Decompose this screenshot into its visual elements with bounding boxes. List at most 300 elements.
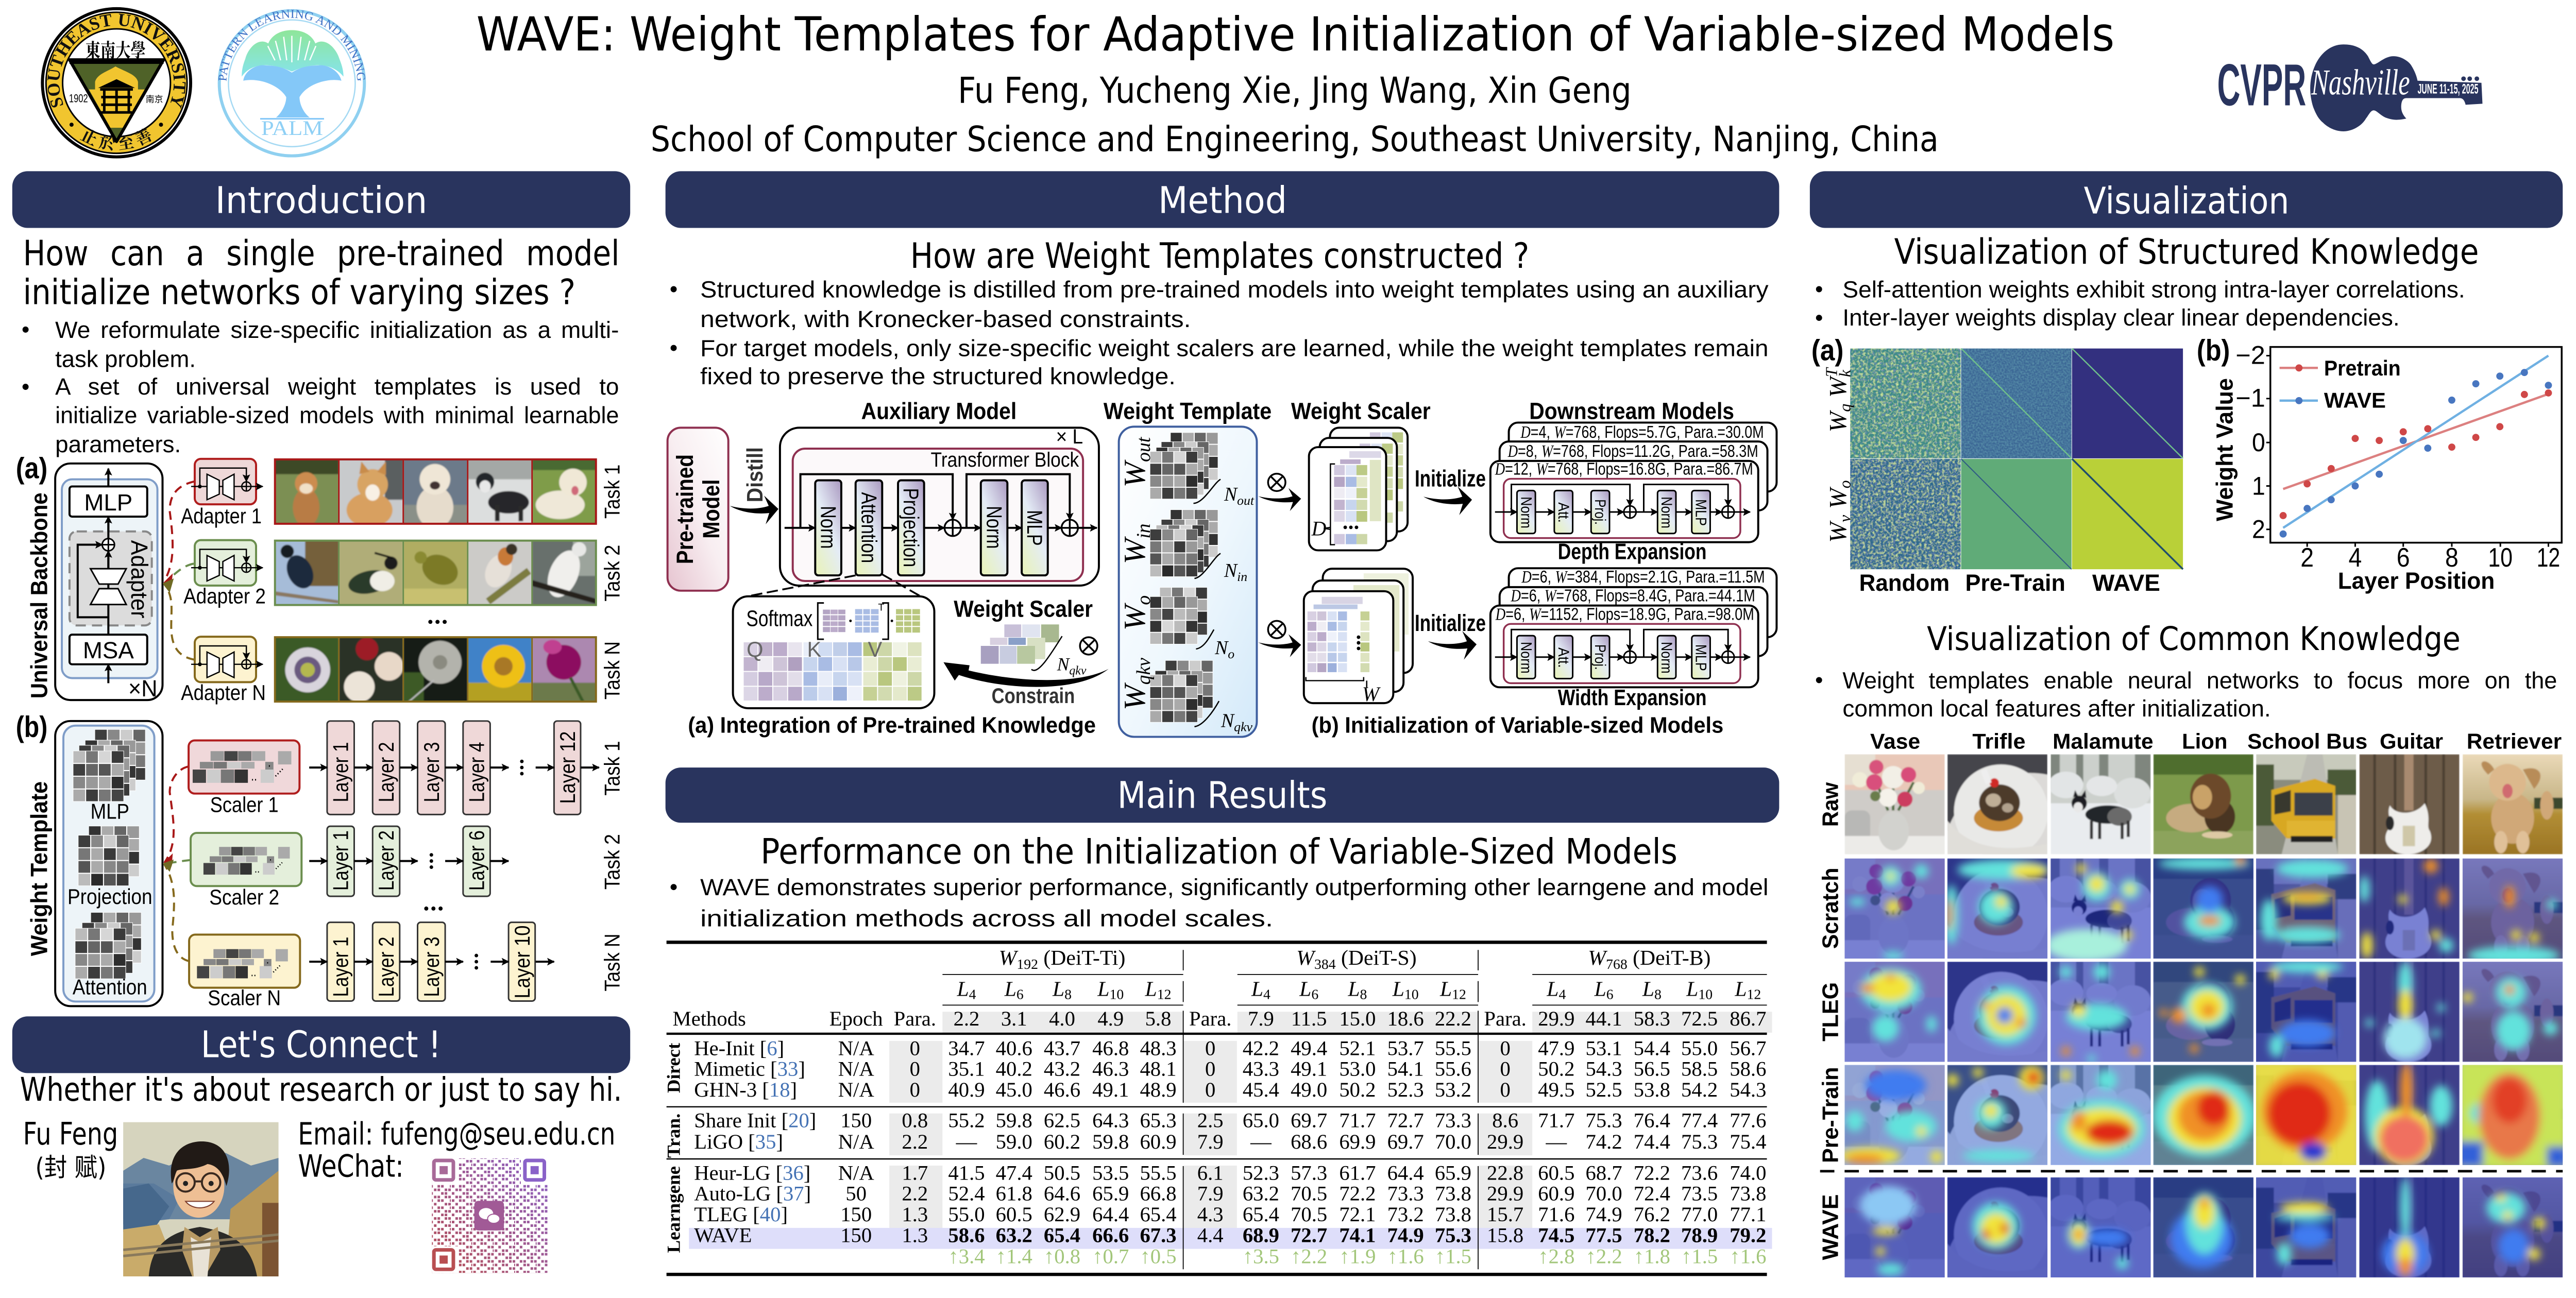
contact name: (封 赋) xyxy=(35,1153,106,1183)
adapter 2: Adapter 2 xyxy=(183,584,266,608)
row: WAVE: 1.3 xyxy=(902,1224,928,1247)
results bullet xyxy=(671,874,1769,932)
panel: Main Results xyxy=(663,767,1779,1274)
task labels for (b): Task N xyxy=(600,933,624,992)
correlation matrices (a) xyxy=(1811,334,2183,596)
row: He-Init: 0 xyxy=(1500,1037,1511,1060)
common knowledge bullet xyxy=(1816,667,2557,722)
row: Auto-LG: 72.4 xyxy=(1634,1182,1670,1205)
row: Share Init: 62.5 xyxy=(1044,1108,1080,1132)
row: Share Init: 75.3 xyxy=(1586,1108,1622,1132)
weight template panel: N xyxy=(1224,484,1237,505)
row: LiGO: 60.2 xyxy=(1044,1130,1080,1153)
table header: layer counts: L xyxy=(1439,978,1452,1001)
row: improvements: ↑1.9 xyxy=(1339,1244,1376,1268)
distill arrow xyxy=(730,447,778,524)
row: GHN-3: N/A xyxy=(838,1078,874,1101)
row: Auto-LG: 2.2 xyxy=(902,1182,928,1205)
table header: layer counts: L xyxy=(1686,978,1698,1001)
row: LiGO: 74.4 xyxy=(1634,1130,1670,1153)
kronecker symbols and arrows to scaler xyxy=(1258,474,1301,657)
table header: layer counts: L xyxy=(1392,978,1404,1001)
task labels: Task 2 xyxy=(600,545,624,602)
row: Auto-LG: 73.3 xyxy=(1387,1182,1424,1205)
caption (b): (b) Initialization of Variable-sized Models xyxy=(1312,713,1723,738)
auxiliary model with transformer block: Transformer Block xyxy=(931,449,1079,471)
row: Share Init: 76.4 xyxy=(1634,1108,1670,1132)
common knowledge bullet: Weight templates enable neural networks to focus more on the xyxy=(1842,667,2557,693)
weight template panel xyxy=(1117,426,1257,737)
row: TLEG: 73.8 xyxy=(1435,1203,1471,1226)
row: Auto-LG: 70.0 xyxy=(1586,1182,1622,1205)
heatmap column labels: Guitar xyxy=(2380,729,2443,753)
row: LiGO: 2.2 xyxy=(902,1130,928,1153)
row: LiGO: 74.2 xyxy=(1586,1130,1622,1153)
row: improvements: ↑2.8 xyxy=(1538,1244,1574,1268)
auxiliary model with transformer block xyxy=(780,425,1099,586)
row: He-Init: 55.5 xyxy=(1435,1037,1471,1060)
row: LiGO: 68.6 xyxy=(1291,1130,1327,1153)
depth scaler cards: D xyxy=(1311,518,1327,540)
table header: column names and parameter counts: 72.5 xyxy=(1681,1007,1718,1030)
weight scaler with constrain arrow xyxy=(943,595,1109,708)
row: Share Init: 150 xyxy=(840,1108,872,1132)
table header: layer counts: 4 xyxy=(1558,986,1566,1002)
row: TLEG: 62.9 xyxy=(1044,1203,1080,1226)
invitation sentence: Whether it's about research or just to say hi. xyxy=(20,1070,622,1108)
row: He-Init: 0 xyxy=(1205,1037,1215,1060)
initialize labels and arrows xyxy=(1415,465,1486,660)
scaler 1 xyxy=(189,741,299,816)
row: Mimetic: 0 xyxy=(1205,1057,1215,1080)
table header: layer counts: 10 xyxy=(1109,986,1124,1002)
row: Heur-LG: 22.8 xyxy=(1487,1162,1523,1185)
row: LiGO: 75.3 xyxy=(1681,1130,1718,1153)
row: He-Init: 40.6 xyxy=(996,1037,1032,1060)
weight scaler with constrain arrow: N xyxy=(1057,654,1069,675)
row: Share Init: 65.3 xyxy=(1140,1108,1177,1132)
task labels for (b): Task 1 xyxy=(600,741,624,796)
scatter chart (b): 2 xyxy=(2252,515,2265,544)
auxiliary model with transformer block: Norm xyxy=(816,506,840,549)
row: Mimetic: 48.1 xyxy=(1140,1057,1177,1080)
method bullet list: network, with Kronecker-based constraints. xyxy=(700,306,1191,332)
auxiliary model with transformer block: Attention xyxy=(857,492,882,563)
universal backbone block xyxy=(55,464,162,702)
scatter chart (b): 6 xyxy=(2397,542,2410,572)
scatter chart (b): Layer Position xyxy=(2338,568,2495,594)
logo: Southeast University seal xyxy=(41,7,192,159)
row: Auto-LG: 60.9 xyxy=(1538,1182,1574,1205)
weight template stack panel: MLP xyxy=(91,799,129,823)
softmax attention detail: V xyxy=(868,637,883,661)
weight scaler with constrain arrow: Constrain xyxy=(992,684,1075,708)
correlation matrices (a): o xyxy=(1836,480,1854,488)
row: improvements: ↑2.2 xyxy=(1291,1244,1327,1268)
structured knowledge bullets: Self-attention weights exhibit strong intra-layer correlations. xyxy=(1842,276,2465,302)
task N layers: Layer 3 xyxy=(419,936,444,997)
correlation matrices (a): W xyxy=(1825,412,1852,432)
heatmap row labels: Scratch xyxy=(1818,868,1843,949)
row: Mimetic: N/A xyxy=(838,1057,874,1080)
heading bar: Introduction: Introduction xyxy=(215,179,427,222)
row: TLEG: 77.0 xyxy=(1681,1203,1718,1226)
task labels for (b): Task 2 xyxy=(600,834,624,890)
task N layers: Layer 10 xyxy=(510,926,534,998)
row: Heur-LG: 1.7 xyxy=(902,1162,928,1185)
row: Mimetic: 58.5 xyxy=(1681,1057,1718,1080)
universal backbone block: ×N xyxy=(128,675,158,702)
row: WAVE: 78.2 xyxy=(1634,1224,1670,1247)
table header: column names and parameter counts: 86.7 xyxy=(1730,1007,1766,1030)
row: He-Init: 43.7 xyxy=(1044,1037,1080,1060)
table header: column names and parameter counts: Para. xyxy=(894,1007,936,1030)
row: TLEG: 73.2 xyxy=(1387,1203,1424,1226)
row: WAVE: 79.2 xyxy=(1730,1224,1766,1247)
row: Auto-LG: 73.8 xyxy=(1435,1182,1471,1205)
row: improvements: ↑0.5 xyxy=(1140,1244,1177,1268)
heading bar: Let's Connect: Let's Connect ! xyxy=(201,1023,441,1066)
table header: column names and parameter counts: 5.8 xyxy=(1145,1007,1171,1030)
task 2 layers xyxy=(309,826,509,896)
adapter N xyxy=(181,637,266,705)
row: He-Init: 46.8 xyxy=(1092,1037,1129,1060)
row: Share Init: 77.4 xyxy=(1681,1108,1718,1132)
question heading: initialize networks of varying sizes ? xyxy=(23,271,575,312)
weight template panel: N xyxy=(1221,710,1234,732)
logo: Southeast University seal: SOUTHEAST UNIVERSITY xyxy=(47,13,185,109)
row: He-Init: He-Init [6] xyxy=(694,1037,784,1060)
structured knowledge bullets xyxy=(1816,276,2465,331)
dashed links from scalers to template xyxy=(164,766,191,961)
row: GHN-3: 52.5 xyxy=(1586,1078,1622,1101)
table rules xyxy=(667,942,1767,1274)
row: He-Init: 49.4 xyxy=(1291,1037,1327,1060)
row: Mimetic: 55.6 xyxy=(1435,1057,1471,1080)
scatter chart (b): 1 xyxy=(2252,471,2265,500)
row: TLEG: 72.1 xyxy=(1339,1203,1376,1226)
weight template panel: in xyxy=(1133,523,1155,539)
width expansion models: Proj. xyxy=(1591,644,1608,670)
task labels xyxy=(600,465,624,699)
row: Auto-LG: 70.5 xyxy=(1291,1182,1327,1205)
adapter 2 xyxy=(183,540,266,608)
task 1 layers xyxy=(309,721,599,814)
row: Heur-LG: 60.5 xyxy=(1538,1162,1574,1185)
logo: Southeast University seal: 1902 xyxy=(69,92,88,105)
table header: layer counts: 8 xyxy=(1064,986,1072,1002)
scatter chart (b): 12 xyxy=(2537,542,2560,572)
bullet list xyxy=(23,317,619,457)
correlation matrices (a): (a) xyxy=(1811,334,1843,367)
weight template panel: o xyxy=(1228,646,1234,661)
panel: Method xyxy=(666,171,1779,738)
task labels: Task 1 xyxy=(600,465,624,519)
affiliation: School of Computer Science and Engineering, Southeast University, Nanjing, China xyxy=(651,119,1939,160)
scaler 1: Scaler 1 xyxy=(210,792,279,816)
row: WAVE: 77.5 xyxy=(1586,1224,1622,1247)
row: improvements: ↑1.6 xyxy=(1387,1244,1424,1268)
email and WeChat labels: Email: fufeng@seu.edu.cn xyxy=(298,1117,615,1152)
depth expansion models: Depth Expansion xyxy=(1558,539,1706,564)
row: Auto-LG: 73.8 xyxy=(1730,1182,1766,1205)
correlation matrices (a): W xyxy=(1825,375,1852,404)
dashed links from adapters to backbone xyxy=(164,482,195,660)
logo: PALM lab: PALM xyxy=(261,117,323,140)
heading bar: Main Results: Main Results xyxy=(1117,774,1327,816)
width expansion models: Norm xyxy=(1517,642,1534,674)
row: improvements: ↑0.7 xyxy=(1092,1244,1129,1268)
universal backbone block: MSA xyxy=(83,637,134,663)
row: Mimetic: 0 xyxy=(910,1057,920,1080)
diagram (a): universal backbone and adapters: Universal Backbone xyxy=(26,492,52,698)
logo: PALM lab xyxy=(217,9,366,158)
diagram (a): universal backbone and adapters xyxy=(16,452,624,705)
row: LiGO: 60.9 xyxy=(1140,1130,1177,1153)
width expansion models: MLP xyxy=(1692,644,1709,671)
row: Pre-Train heatmaps xyxy=(1839,1060,2568,1170)
row: TLEG: 70.5 xyxy=(1291,1203,1327,1226)
table header: layer counts: 10 xyxy=(1404,986,1419,1002)
column heading: weight scaler: Weight Scaler xyxy=(1291,398,1431,424)
table header: layer counts: 8 xyxy=(1654,986,1662,1002)
row: He-Init: 53.1 xyxy=(1586,1037,1622,1060)
diagram (b): weight template, scalers and layers: (b) xyxy=(16,711,47,744)
table header: model groups: 384 xyxy=(1314,957,1336,972)
row: GHN-3: 54.2 xyxy=(1681,1078,1718,1101)
heatmap column labels: School Bus xyxy=(2247,729,2367,753)
row: WAVE: 4.4 xyxy=(1197,1224,1224,1247)
row: GHN-3: 54.3 xyxy=(1730,1078,1766,1101)
task 1 layers: Layer 3 xyxy=(419,742,444,802)
method bullet list xyxy=(671,276,1769,389)
row: GHN-3: 49.0 xyxy=(1291,1078,1327,1101)
row: Mimetic: 54.3 xyxy=(1586,1057,1622,1080)
group labels: Learngene xyxy=(663,1166,684,1253)
row: WAVE: 74.9 xyxy=(1387,1224,1424,1247)
row: improvements: ↑3.5 xyxy=(1243,1244,1279,1268)
task 2 layers: Layer 6 xyxy=(464,830,488,891)
caption (a): (a) Integration of Pre-trained Knowledge xyxy=(688,713,1096,738)
weight template panel: out xyxy=(1133,436,1155,462)
depth expansion models: Proj. xyxy=(1591,499,1608,525)
row: Heur-LG: 74.0 xyxy=(1730,1162,1766,1185)
row: Heur-LG: 73.6 xyxy=(1681,1162,1718,1185)
row: TLEG: 71.6 xyxy=(1538,1203,1574,1226)
auxiliary model with transformer block: Projection xyxy=(899,488,923,567)
row: LiGO: 7.9 xyxy=(1197,1130,1224,1153)
row: LiGO: 29.9 xyxy=(1487,1130,1523,1153)
row: Share Init: 65.0 xyxy=(1243,1108,1279,1132)
row: Heur-LG: 47.4 xyxy=(996,1162,1032,1185)
softmax attention detail: T xyxy=(878,602,884,613)
depth expansion models: D=4, W=768, Flops=5.7G, Para.=30.0M xyxy=(1520,422,1764,442)
task 2 image strip: birds xyxy=(275,540,597,606)
heading bar: Method: Method xyxy=(1158,179,1287,222)
row: improvements: ↑1.8 xyxy=(1634,1244,1670,1268)
heatmap row labels: Raw xyxy=(1818,782,1843,827)
row: improvements: ↑1.4 xyxy=(996,1244,1032,1268)
row: GHN-3: 49.1 xyxy=(1092,1078,1129,1101)
row: Auto-LG: 7.9 xyxy=(1197,1182,1224,1205)
row: Mimetic: 43.2 xyxy=(1044,1057,1080,1080)
correlation matrices (a): Pre-Train xyxy=(1965,570,2065,596)
width scaler cards xyxy=(1304,569,1413,706)
weight template panel: N xyxy=(1215,637,1228,659)
row: TLEG: 64.4 xyxy=(1092,1203,1129,1226)
correlation matrices (a): Random xyxy=(1859,570,1950,596)
scaler N xyxy=(189,934,300,1010)
task 1 layers: Layer 12 xyxy=(555,731,580,804)
auxiliary model with transformer block: Norm xyxy=(982,506,1007,549)
group labels: Tran. xyxy=(663,1114,684,1158)
row: Mimetic: 54.1 xyxy=(1387,1057,1424,1080)
method bullet list: fixed to preserve the structured knowledge. xyxy=(700,363,1176,389)
depth expansion models: D=12, W=768, Flops=16.8G, Para.=86.7M xyxy=(1495,459,1753,479)
depth expansion models: Att. xyxy=(1555,502,1572,523)
row: Auto-LG: 72.2 xyxy=(1339,1182,1376,1205)
weight template panel: out xyxy=(1237,493,1255,508)
row: Mimetic: 0 xyxy=(1500,1057,1511,1080)
row: TLEG: 150 xyxy=(840,1203,872,1226)
row: improvements: ↑3.4 xyxy=(948,1244,985,1268)
row: WAVE: 72.7 xyxy=(1291,1224,1327,1247)
row: Auto-LG: 61.8 xyxy=(996,1182,1032,1205)
row: TLEG: 55.0 xyxy=(948,1203,985,1226)
row: Mimetic: 46.3 xyxy=(1092,1057,1129,1080)
row: Share Init xyxy=(694,1108,1766,1132)
weight scaler with constrain arrow: Weight Scaler xyxy=(954,595,1093,622)
table header: column names and parameter counts xyxy=(673,1007,1766,1030)
method bullet list: Structured knowledge is distilled from pre-trained models into weight templates using an auxiliary xyxy=(700,276,1769,302)
table header: layer counts: L xyxy=(1004,978,1016,1001)
adapter 1: Adapter 1 xyxy=(181,504,262,528)
task N layers: Layer 2 xyxy=(374,936,398,997)
heatmap column labels: Lion xyxy=(2182,729,2227,753)
table header: column names and parameter counts: 4.9 xyxy=(1097,1007,1124,1030)
task 1 layers: Layer 4 xyxy=(464,742,488,802)
authors: Fu Feng, Yucheng Xie, Jing Wang, Xin Geng xyxy=(958,70,1632,111)
bullet list: We reformulate size-specific initialization as a multi- xyxy=(55,317,619,343)
correlation matrices (a): T xyxy=(1822,367,1840,377)
weight template panel: qkv xyxy=(1133,658,1155,685)
weight template panel: in xyxy=(1237,569,1247,584)
row: GHN-3: 40.9 xyxy=(948,1078,985,1101)
bullet list: initialize variable-sized models with minimal learnable xyxy=(55,402,619,428)
row: Mimetic: 50.2 xyxy=(1538,1057,1574,1080)
table header: column names and parameter counts: 29.9 xyxy=(1538,1007,1574,1030)
row: Heur-LG: 68.7 xyxy=(1586,1162,1622,1185)
task 1 image strip: dogs xyxy=(275,459,597,529)
row: TLEG: TLEG [40] xyxy=(694,1203,788,1226)
row: Heur-LG xyxy=(694,1162,1766,1185)
row: Share Init: Share Init [20] xyxy=(694,1108,816,1132)
table header: model groups: 768 xyxy=(1606,957,1628,972)
table header: layer counts: L xyxy=(1251,978,1263,1001)
table header: layer counts: 6 xyxy=(1606,986,1614,1002)
row: improvements: ↑0.8 xyxy=(1044,1244,1080,1268)
row: WAVE: 15.8 xyxy=(1487,1224,1523,1247)
logo: Southeast University seal: 止 於 至 善 xyxy=(80,129,151,150)
group labels: Direct xyxy=(663,1043,684,1093)
row: Mimetic: 58.6 xyxy=(1730,1057,1766,1080)
row: improvements: ↑1.5 xyxy=(1681,1244,1718,1268)
row: GHN-3: 45.0 xyxy=(996,1078,1032,1101)
table header: model groups: W xyxy=(1588,946,1607,970)
scatter chart (b) xyxy=(2197,334,2562,594)
row: TLEG: 65.4 xyxy=(1140,1203,1177,1226)
row: He-Init: 55.0 xyxy=(1681,1037,1718,1060)
row: WAVE: WAVE xyxy=(694,1224,752,1247)
table header: column names and parameter counts: Para. xyxy=(1189,1007,1231,1030)
QR code xyxy=(432,1158,547,1273)
row: LiGO: 70.0 xyxy=(1435,1130,1471,1153)
portrait illustration xyxy=(123,1122,279,1276)
row: Heur-LG: 72.2 xyxy=(1634,1162,1670,1185)
table header: layer counts: 10 xyxy=(1698,986,1713,1002)
task 1 layers: Layer 2 xyxy=(374,742,398,802)
row: GHN-3 xyxy=(694,1078,1766,1101)
row: improvements: ↑1.5 xyxy=(1435,1244,1471,1268)
adapter 1 xyxy=(181,459,263,528)
depth expansion models xyxy=(1490,422,1776,564)
table header: layer counts: 12 xyxy=(1747,986,1761,1002)
scaler 2 xyxy=(191,833,301,909)
row: TLEG xyxy=(694,1203,1766,1226)
row: Heur-LG: 6.1 xyxy=(1197,1162,1224,1185)
depth scaler cards xyxy=(1309,428,1408,550)
row: He-Init: 48.3 xyxy=(1140,1037,1177,1060)
row: GHN-3: 46.6 xyxy=(1044,1078,1080,1101)
table header: column names and parameter counts: Methods xyxy=(673,1007,746,1030)
task N layers xyxy=(309,923,554,1001)
row: WAVE: 66.6 xyxy=(1092,1224,1129,1247)
row: WAVE: 74.1 xyxy=(1339,1224,1376,1247)
row: He-Init: N/A xyxy=(838,1037,874,1060)
row: WAVE: 75.3 xyxy=(1435,1224,1471,1247)
row: LiGO: — xyxy=(956,1130,977,1153)
row: Share Init: 73.3 xyxy=(1435,1108,1471,1132)
table header: layer counts: L xyxy=(1642,978,1654,1001)
column heading: auxiliary model: Auxiliary Model xyxy=(861,398,1016,424)
heading bar: Introduction xyxy=(12,171,630,228)
pre-trained model box: Pre-trained xyxy=(672,454,698,564)
task 2 layers: Layer 1 xyxy=(329,830,353,891)
table header: model groups: 192 xyxy=(1016,957,1038,972)
email and WeChat labels: WeChat: xyxy=(298,1149,404,1185)
row: Share Init: 77.6 xyxy=(1730,1108,1766,1132)
row: GHN-3: GHN-3 [18] xyxy=(694,1078,797,1101)
table header: column names and parameter counts: 44.1 xyxy=(1586,1007,1622,1030)
row: improvements: ↑1.6 xyxy=(1730,1244,1766,1268)
row: LiGO: 69.7 xyxy=(1387,1130,1424,1153)
heatmap column labels: Trifle xyxy=(1972,729,2026,753)
table header: column names and parameter counts: Epoch xyxy=(829,1007,883,1030)
row: Heur-LG: Heur-LG [36] xyxy=(694,1162,810,1185)
row: Auto-LG: 50 xyxy=(845,1182,867,1205)
row: Mimetic: Mimetic [33] xyxy=(694,1057,805,1080)
table header: layer counts: L xyxy=(1145,978,1157,1001)
row: Auto-LG: 65.9 xyxy=(1092,1182,1129,1205)
heading bar: Method xyxy=(666,171,1779,228)
correlation matrices (a): W xyxy=(1825,522,1852,543)
contact name xyxy=(23,1117,118,1183)
heatmap row labels xyxy=(1818,782,1843,1260)
softmax attention detail: Q xyxy=(747,637,763,661)
logo: CVPR Nashville guitar: CVPR xyxy=(2217,52,2306,118)
task N layers: Layer 1 xyxy=(329,936,353,997)
pre-trained model box xyxy=(668,428,728,591)
